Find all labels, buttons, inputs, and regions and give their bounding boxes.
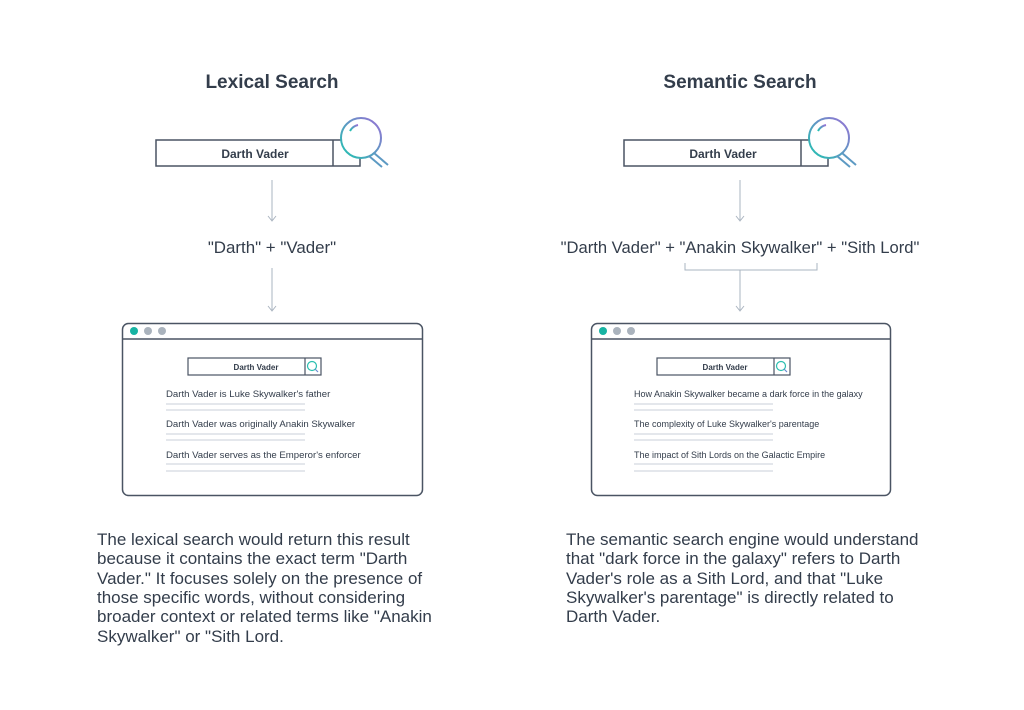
query terms: "Darth" + "Vader"	[208, 238, 336, 257]
icon: magnifier	[341, 118, 388, 167]
title: Lexical Search: Lexical Search	[205, 72, 339, 93]
title: Semantic Search: Semantic Search	[663, 72, 817, 93]
search bar	[624, 140, 828, 166]
browser window: semantic results: How Anakin Skywalker became a dark force in the galaxy	[634, 389, 863, 399]
text block: lexical explanation: because it contains the exact term "Darth	[97, 549, 407, 568]
arrow	[268, 268, 276, 311]
search bar	[156, 140, 360, 166]
text block: lexical explanation: those specific words, without considering	[97, 588, 405, 607]
arrow	[736, 180, 744, 221]
browser window: lexical results	[122, 324, 422, 496]
text block: lexical explanation: Vader." It focuses solely on the presence of	[97, 569, 422, 588]
text block: lexical explanation: broader context or related terms like "Anakin	[97, 607, 432, 626]
text block: semantic explanation: Darth Vader.	[566, 607, 660, 626]
panel: semantic search	[561, 72, 919, 626]
icon: magnifier	[809, 118, 856, 167]
text block: semantic explanation: that "dark force in the galaxy" refers to Darth	[566, 549, 900, 568]
browser window: semantic results: The complexity of Luke Skywalker's parentage	[634, 419, 819, 429]
search bar: Darth Vader	[689, 147, 757, 161]
text block: lexical explanation: The lexical search would return this result	[97, 530, 410, 549]
text block: semantic explanation: Skywalker's parentage" is directly related to	[566, 588, 894, 607]
browser window: semantic results	[592, 324, 890, 496]
text block: semantic explanation: The semantic search engine would understand	[566, 530, 918, 549]
bracket arrow	[685, 263, 817, 311]
browser window: semantic results: The impact of Sith Lords on the Galactic Empire	[634, 450, 825, 460]
panel: lexical search	[97, 72, 432, 646]
search bar: Darth Vader	[221, 147, 289, 161]
browser window: lexical results: Darth Vader was originally Anakin Skywalker	[166, 419, 356, 430]
text block: lexical explanation: Skywalker" or "Sith Lord.	[97, 627, 284, 646]
arrow	[268, 180, 276, 221]
browser window: lexical results: Darth Vader	[234, 363, 278, 372]
browser window: lexical results: Darth Vader is Luke Skywalker's father	[166, 389, 331, 400]
browser window: lexical results: Darth Vader serves as the Emperor's enforcer	[166, 450, 361, 461]
browser window: semantic results: Darth Vader	[703, 363, 747, 372]
query terms: "Darth Vader" + "Anakin Skywalker" + "Sith Lord"	[561, 238, 919, 257]
text block: semantic explanation: Vader's role as a Sith Lord, and that "Luke	[566, 569, 883, 588]
